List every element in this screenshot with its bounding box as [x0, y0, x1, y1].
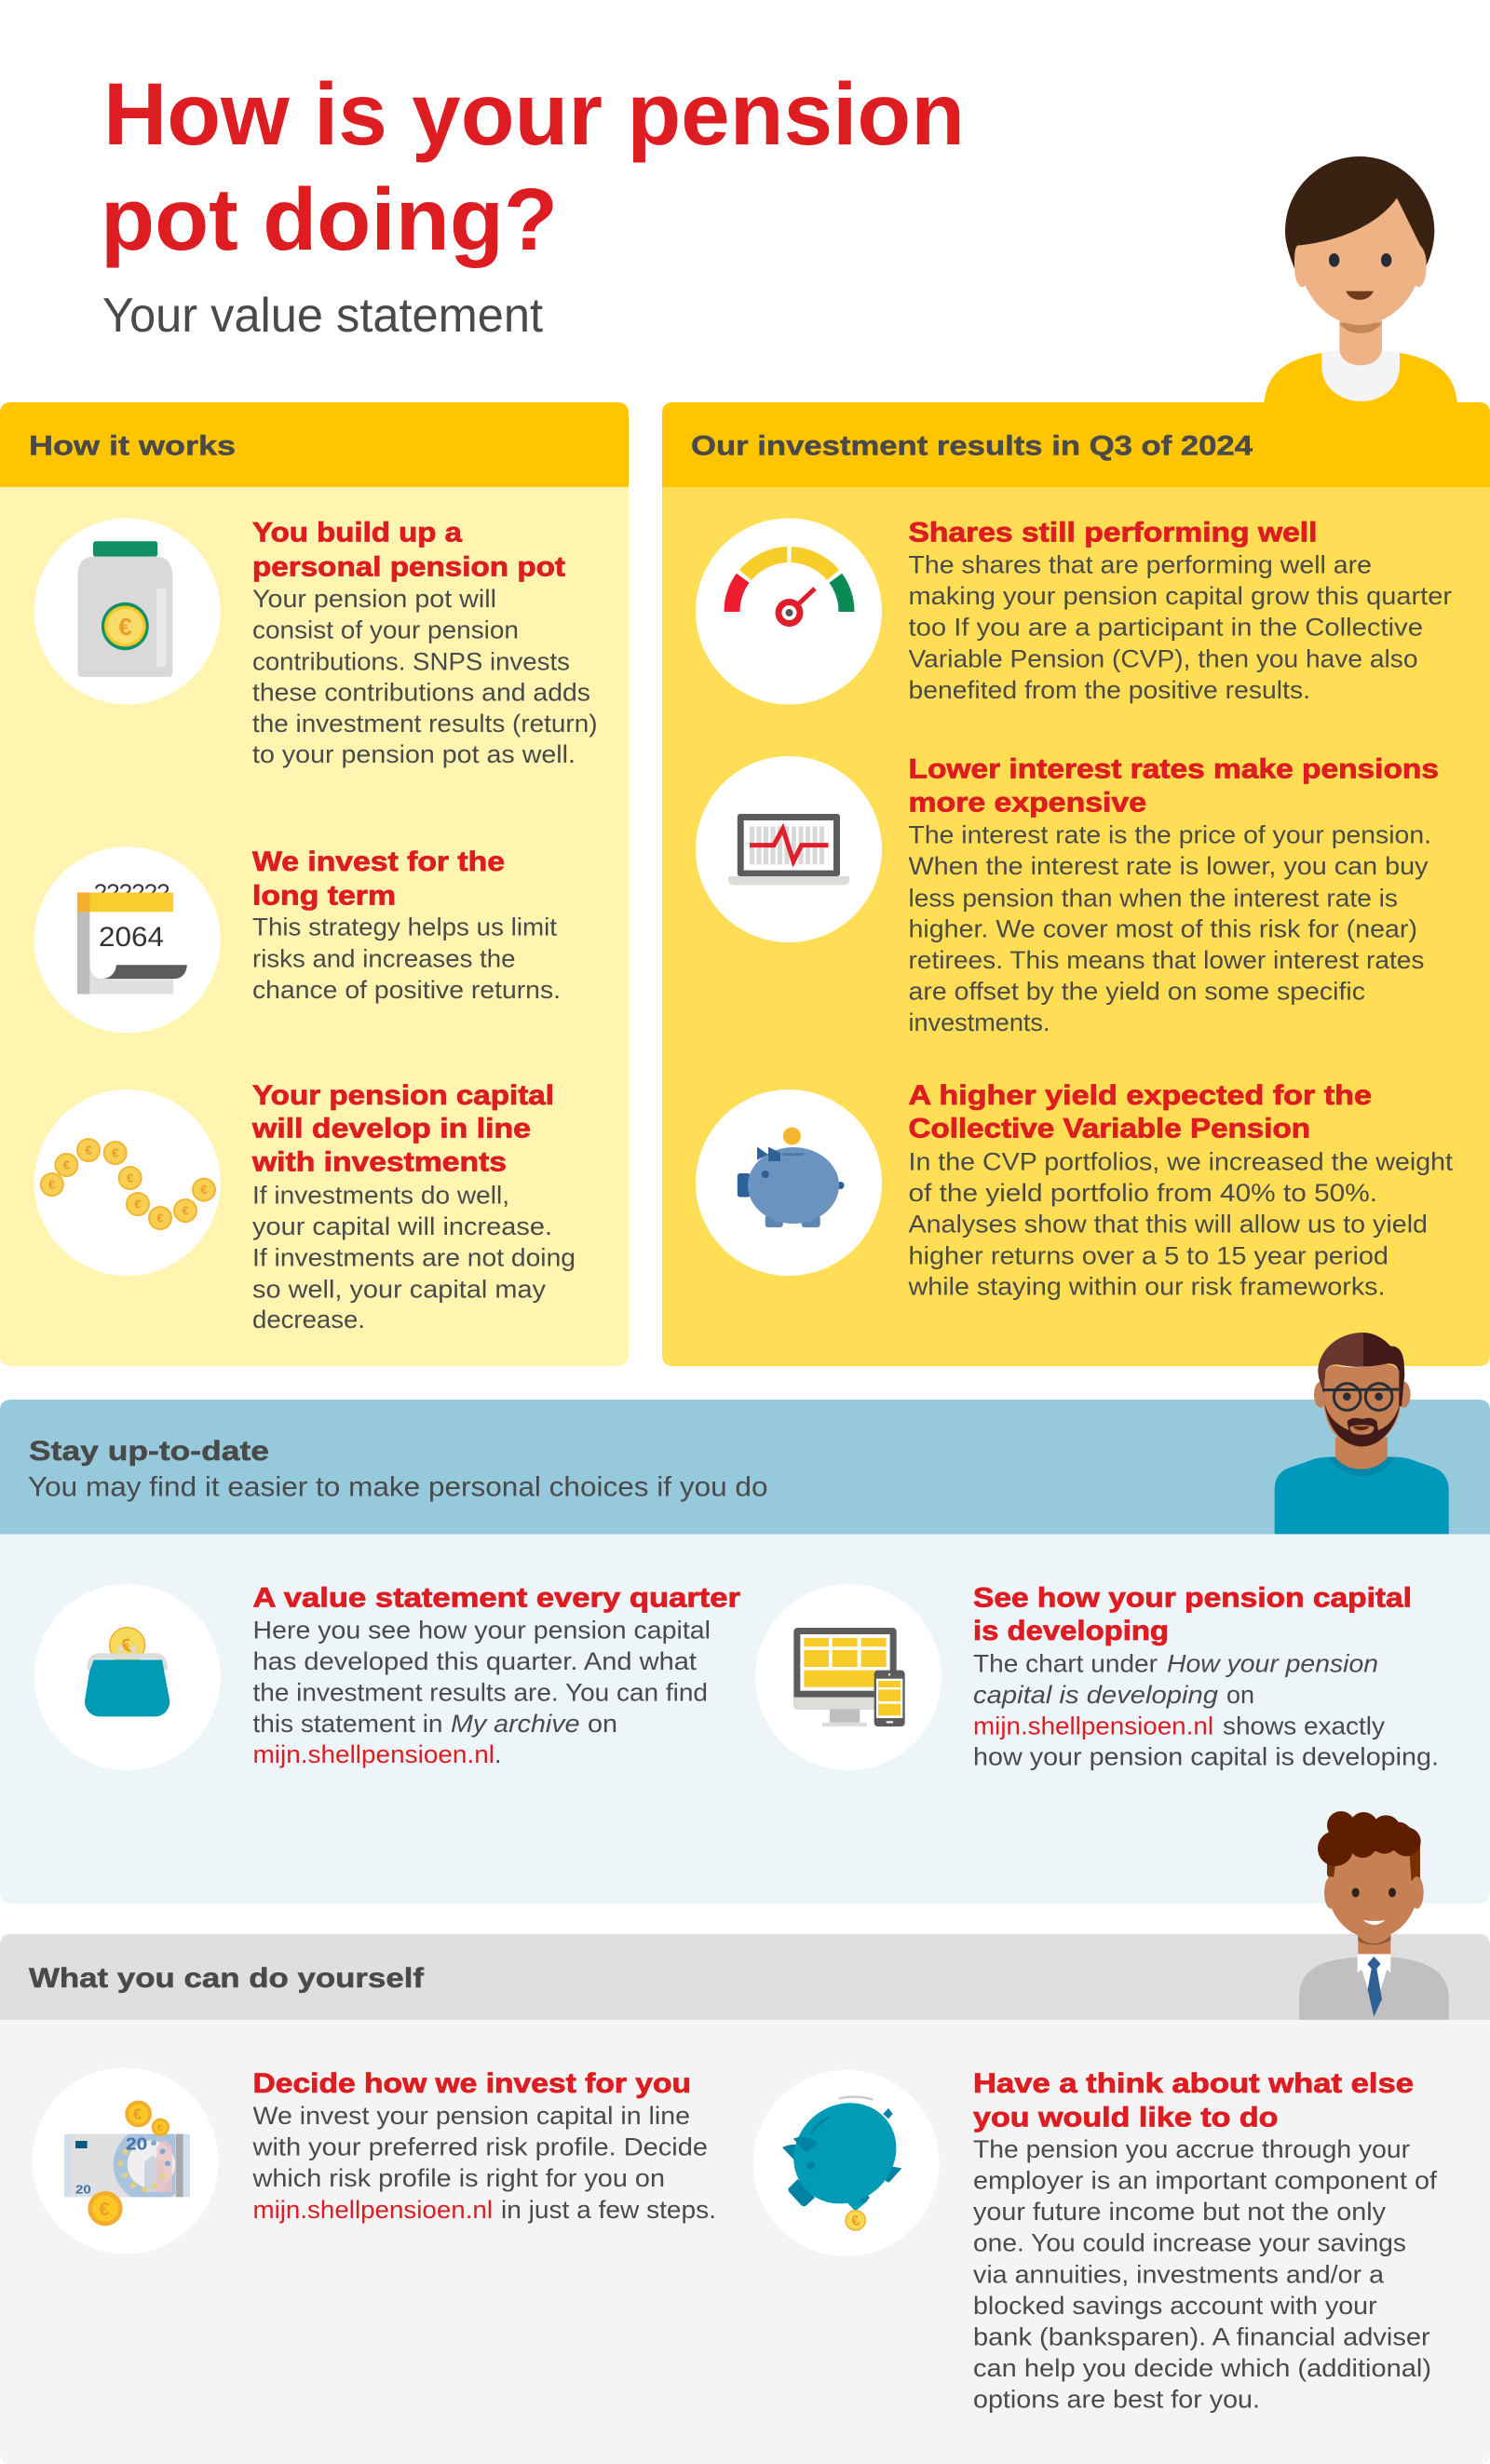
text: value statement every quarter: has developed this quarter. And what	[253, 1647, 698, 1675]
panel: what you can do yourself	[0, 1934, 1490, 2464]
text: value statement every quarter: mijn.shellpensioen.nl	[253, 1740, 494, 1768]
text: build up pension pot: the investment results (return)	[252, 710, 598, 738]
heading: how it works: How it works	[29, 430, 236, 462]
person: woman in yellow top	[1264, 156, 1457, 403]
text: shares performing	[909, 518, 1452, 704]
icon: coin wave: €	[134, 1198, 142, 1211]
text: lower interest rates: investments.	[909, 1009, 1050, 1036]
text: think about what else: bank (banksparen). A financial adviser	[973, 2323, 1430, 2351]
icon: euro banknote and coins: €	[133, 2105, 142, 2123]
text: shares performing: Shares still performing well	[909, 518, 1317, 548]
text: think about what else: your future income but not the only	[973, 2198, 1387, 2226]
text: higher yield expected: of the yield portfolio from 40% to 50%.	[909, 1179, 1377, 1207]
text: value statement every quarter: on	[588, 1710, 617, 1738]
text: build up pension pot: personal pension pot	[252, 551, 565, 583]
text: higher yield expected: Collective Variable Pension	[909, 1114, 1310, 1144]
text: invest long term: We invest for the	[252, 846, 505, 877]
text: shares performing: Variable Pension (CVP), then you have also	[909, 644, 1417, 672]
text: shares performing: making your pension capital grow this quarter	[909, 582, 1452, 610]
icon: teal piggy bank tipped over: €	[850, 2213, 862, 2230]
text: capital develops with investments	[251, 1080, 576, 1334]
text: lower interest rates: When the interest rate is lower, you can buy	[909, 852, 1429, 880]
icon: monitor and phone	[755, 1584, 941, 1770]
text: think about what else: employer is an important component of	[973, 2166, 1438, 2194]
icon: coin wave: €	[48, 1177, 55, 1192]
panel: how it works	[0, 402, 629, 1366]
heading: stay up-to-date: Stay up-to-date	[29, 1436, 269, 1467]
heading: what you can do yourself: What you can do yourself	[29, 1963, 425, 1994]
text: lower interest rates: higher. We cover most of this risk for (near)	[909, 914, 1417, 942]
text: value statement every quarter: My archive	[451, 1710, 579, 1738]
text: see how capital develops: how your pension capital is developing.	[973, 1743, 1439, 1771]
icon: coin wave: €	[200, 1183, 208, 1197]
text: decide how we invest	[251, 2068, 716, 2224]
text: build up pension pot: Your pension pot will	[252, 585, 496, 613]
text: invest long term: This strategy helps us limit	[252, 913, 558, 941]
text: invest long term: chance of positive returns.	[252, 976, 561, 1004]
text: think about what else	[973, 2068, 1438, 2414]
heading: investment results: Our investment results in Q3 of 2024	[691, 430, 1253, 462]
text: decide how we invest: in just a few steps.	[501, 2196, 716, 2224]
text: think about what else: Have a think about what else	[973, 2068, 1414, 2099]
text: think about what else: can help you decide which (additional)	[973, 2354, 1431, 2382]
title	[101, 65, 965, 269]
text: invest long term	[252, 846, 561, 1004]
text: higher yield expected: In the CVP portfolios, we increased the weight	[909, 1147, 1454, 1175]
text: capital develops with investments: If investments are not doing	[252, 1244, 576, 1272]
text: capital develops with investments: If investments do well,	[252, 1181, 509, 1209]
icon: pension jar: €	[118, 613, 132, 641]
icon: coin wave: €	[182, 1203, 189, 1218]
icon: coin wave: €	[85, 1144, 92, 1157]
text: think about what else: one. You could increase your savings	[973, 2229, 1406, 2257]
icon: blue piggy bank	[696, 1090, 882, 1276]
text: higher yield expected: higher returns over a 5 to 15 year period	[909, 1242, 1388, 1270]
text: lower interest rates: are offset by the yield on some specific	[909, 978, 1365, 1006]
icon: euro banknote and coins: 20	[126, 2133, 147, 2153]
text: shares performing: too If you are a participant in the Collective	[909, 613, 1423, 641]
title: How is your pension	[103, 65, 965, 164]
text: decide how we invest: Decide how we invest for you	[253, 2068, 691, 2099]
text: value statement every quarter: the investment results are. You can find	[253, 1678, 708, 1706]
text: think about what else: The pension you accrue through your	[973, 2135, 1410, 2163]
text: shares performing: The shares that are performing well are	[909, 551, 1372, 579]
text: decide how we invest: mijn.shellpensioen.nl	[253, 2196, 493, 2224]
heading: stay up-to-date: You may find it easier to make personal choices if you do	[28, 1471, 767, 1503]
text: capital develops with investments: Your pension capital	[252, 1080, 554, 1111]
person: man with beard and glasses	[1275, 1333, 1449, 1534]
text: capital develops with investments: so well, your capital may	[252, 1276, 547, 1304]
text: see how capital develops: See how your pension capital	[973, 1583, 1412, 1614]
icon: euro banknote and coins	[32, 2067, 218, 2254]
text: see how capital develops	[973, 1583, 1439, 1771]
heading: stay up-to-date	[28, 1436, 767, 1503]
text: think about what else: blocked savings account with your	[973, 2292, 1377, 2320]
text: think about what else: options are best for you.	[973, 2386, 1260, 2414]
text: capital develops with investments: decrease.	[252, 1306, 365, 1334]
text: higher yield expected: A higher yield expected for the	[909, 1080, 1372, 1111]
text: see how capital develops: capital is developing	[973, 1681, 1218, 1709]
text: lower interest rates: Lower interest rates make pensions	[909, 754, 1439, 784]
text: see how capital develops: is developing	[973, 1616, 1169, 1646]
text: see how capital develops: The chart under	[973, 1650, 1158, 1678]
text: see how capital develops: on	[1226, 1681, 1254, 1709]
text: lower interest rates	[909, 754, 1439, 1036]
text: value statement every quarter: this statement in	[253, 1710, 443, 1738]
text: higher yield expected: Analyses show that this will allow us to yield	[909, 1211, 1428, 1239]
icon: coin wave: €	[127, 1171, 133, 1185]
icon: teal piggy bank tipped over	[753, 2070, 940, 2256]
text: value statement every quarter	[253, 1583, 740, 1768]
title: pot doing?	[101, 170, 558, 269]
icon: calendar 2064: 2064	[99, 922, 164, 953]
icon: euro banknote and coins: €	[157, 2122, 163, 2133]
text: decide how we invest: with your preferred risk profile. Decide	[251, 2132, 708, 2160]
icon: coin wave: €	[112, 1145, 118, 1160]
icon: purse with coin	[34, 1584, 221, 1770]
text: invest long term: risks and increases the	[252, 944, 516, 972]
text: value statement every quarter: A value statement every quarter	[253, 1583, 740, 1614]
icon: purse with coin: €	[117, 1633, 138, 1658]
text: lower interest rates: less pension than when the interest rate is	[909, 885, 1398, 913]
text: invest long term: long term	[252, 881, 396, 911]
icon: gauge	[696, 518, 882, 704]
text: decide how we invest: We invest your pension capital in line	[253, 2102, 690, 2130]
icon: euro banknote and coins: €	[99, 2200, 110, 2220]
text: higher yield expected: while staying within our risk frameworks.	[907, 1272, 1386, 1300]
panel: investment results	[662, 402, 1490, 1366]
text: lower interest rates: The interest rate is the price of your pension.	[909, 821, 1431, 849]
text: shares performing: benefited from the positive results.	[909, 676, 1310, 704]
text: capital develops with investments: with investments	[251, 1147, 507, 1177]
text: build up pension pot: consist of your pension	[252, 616, 519, 644]
icon: euro banknote and coins: 20	[75, 2183, 91, 2196]
text: see how capital develops: mijn.shellpensioen.nl	[973, 1712, 1213, 1740]
text: think about what else: via annuities, investments and/or a	[973, 2261, 1385, 2289]
text: build up pension pot: to your pension pot as well.	[252, 740, 576, 768]
icon: coin wave	[34, 1090, 221, 1276]
icon: laptop chart	[696, 756, 882, 942]
text: build up pension pot: contributions. SNPS invests	[252, 648, 570, 676]
icon: coin wave: €	[156, 1211, 164, 1225]
text: build up pension pot: these contributions and adds	[252, 678, 590, 706]
subtitle: Your value statement	[102, 289, 544, 343]
text: capital develops with investments: will develop in line	[251, 1114, 531, 1144]
panel: stay up-to-date	[0, 1400, 1490, 1903]
icon: calendar 2064: ??????	[94, 880, 169, 906]
icon: coin wave: €	[63, 1158, 70, 1171]
person: man in grey suit	[1299, 1811, 1449, 2020]
icon: calendar 2064	[34, 846, 221, 1033]
text: see how capital develops: shows exactly	[1223, 1712, 1386, 1740]
text: lower interest rates: more expensive	[909, 788, 1146, 818]
text: decide how we invest: which risk profile is right for you on	[251, 2164, 665, 2192]
text: value statement every quarter: Here you see how your pension capital	[253, 1617, 711, 1645]
text: build up pension pot: You build up a	[252, 518, 462, 548]
icon: pension jar	[34, 518, 221, 704]
text: lower interest rates: retirees. This means that lower interest rates	[909, 946, 1425, 974]
text: capital develops with investments: your capital will increase.	[252, 1212, 552, 1240]
text: build up pension pot	[252, 518, 598, 768]
text: higher yield expected	[907, 1080, 1454, 1300]
text: think about what else: you would like to do	[973, 2102, 1278, 2132]
text: see how capital develops: How your pension	[1167, 1650, 1378, 1678]
text: value statement every quarter: .	[494, 1740, 502, 1768]
